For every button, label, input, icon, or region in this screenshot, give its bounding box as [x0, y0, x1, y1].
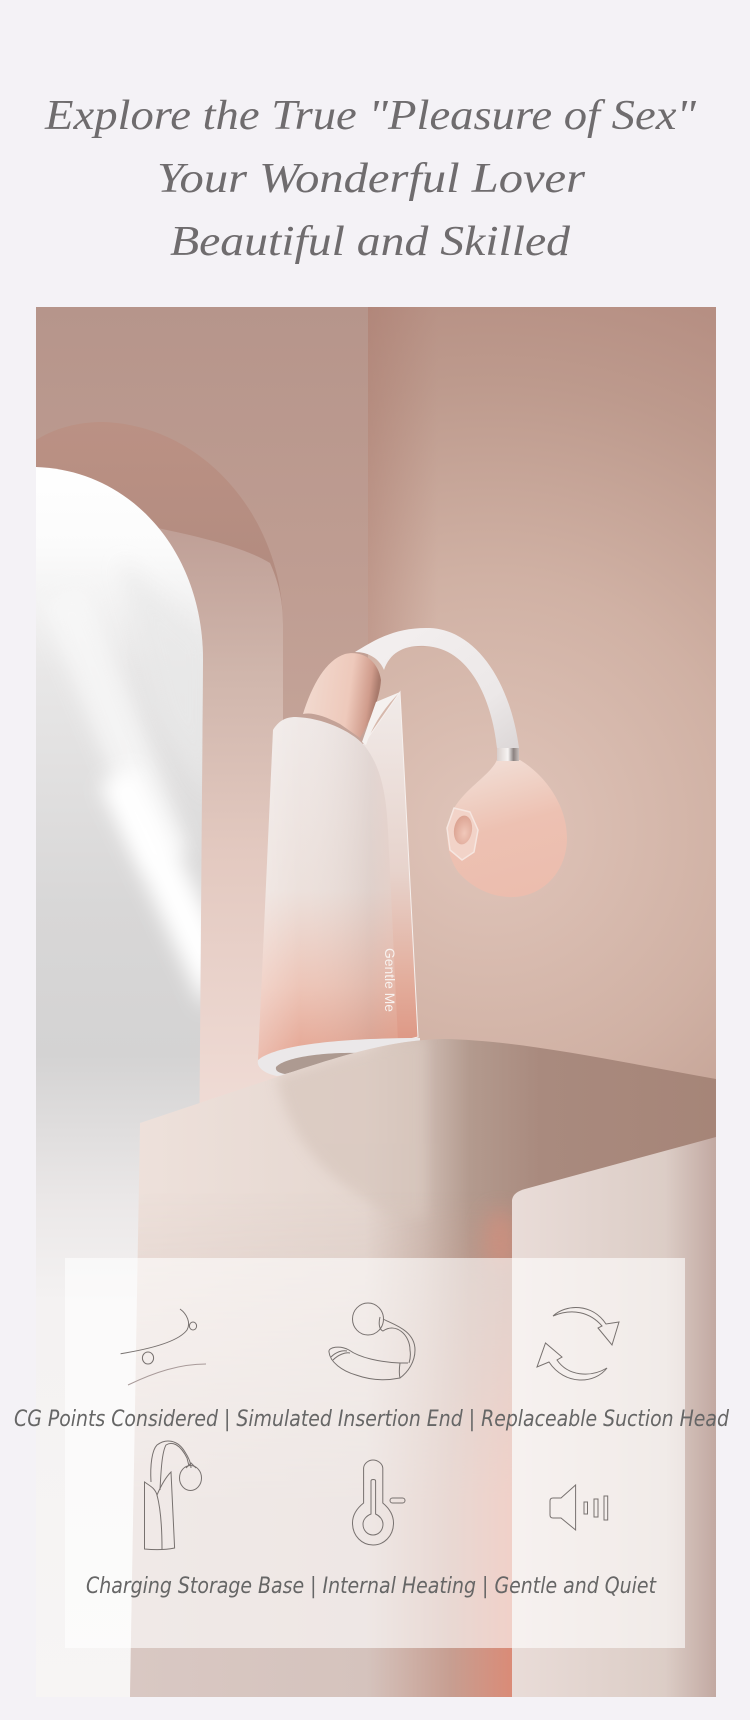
icon: replaceable suction head arrows: [537, 1307, 619, 1380]
white arch with light streaks: [36, 467, 203, 1264]
product: storage base and device: [258, 628, 567, 1076]
title: [44, 93, 696, 265]
suction ring: [447, 808, 478, 860]
insertion end: [303, 653, 381, 738]
suction hole: [454, 816, 472, 844]
icon: thermometer: [352, 1460, 405, 1545]
flexible neck: [355, 628, 519, 748]
caption: second row: Charging Storage Base | Internal Heating | Gentle and Quiet: [86, 1574, 657, 1599]
front block: [512, 1137, 716, 1697]
left wall: [36, 307, 368, 744]
back panel: [363, 692, 418, 1050]
pedestal: [130, 1039, 716, 1697]
base underside: [276, 1053, 360, 1074]
outer arch: [36, 422, 283, 1120]
icon: charging storage base: [144, 1441, 202, 1550]
icon: CG points: [121, 1309, 206, 1385]
base ring: [258, 1038, 420, 1076]
white inner cut of panel: [362, 692, 400, 745]
panel: translucent feature box: [65, 1258, 685, 1648]
title: Beautiful and Skilled: [170, 219, 571, 265]
front shell: [258, 717, 398, 1062]
icon: simulated insertion end: [329, 1303, 415, 1380]
icon: speaker quiet: [550, 1485, 608, 1530]
right wall: [368, 307, 716, 1107]
title: Your Wonderful Lover: [157, 156, 586, 202]
brand label: Gentle Me: [382, 948, 398, 1012]
suction head: [447, 748, 567, 897]
panel: product photo scene: [36, 307, 716, 1700]
title: Explore the True "Pleasure of Sex": [44, 93, 696, 139]
